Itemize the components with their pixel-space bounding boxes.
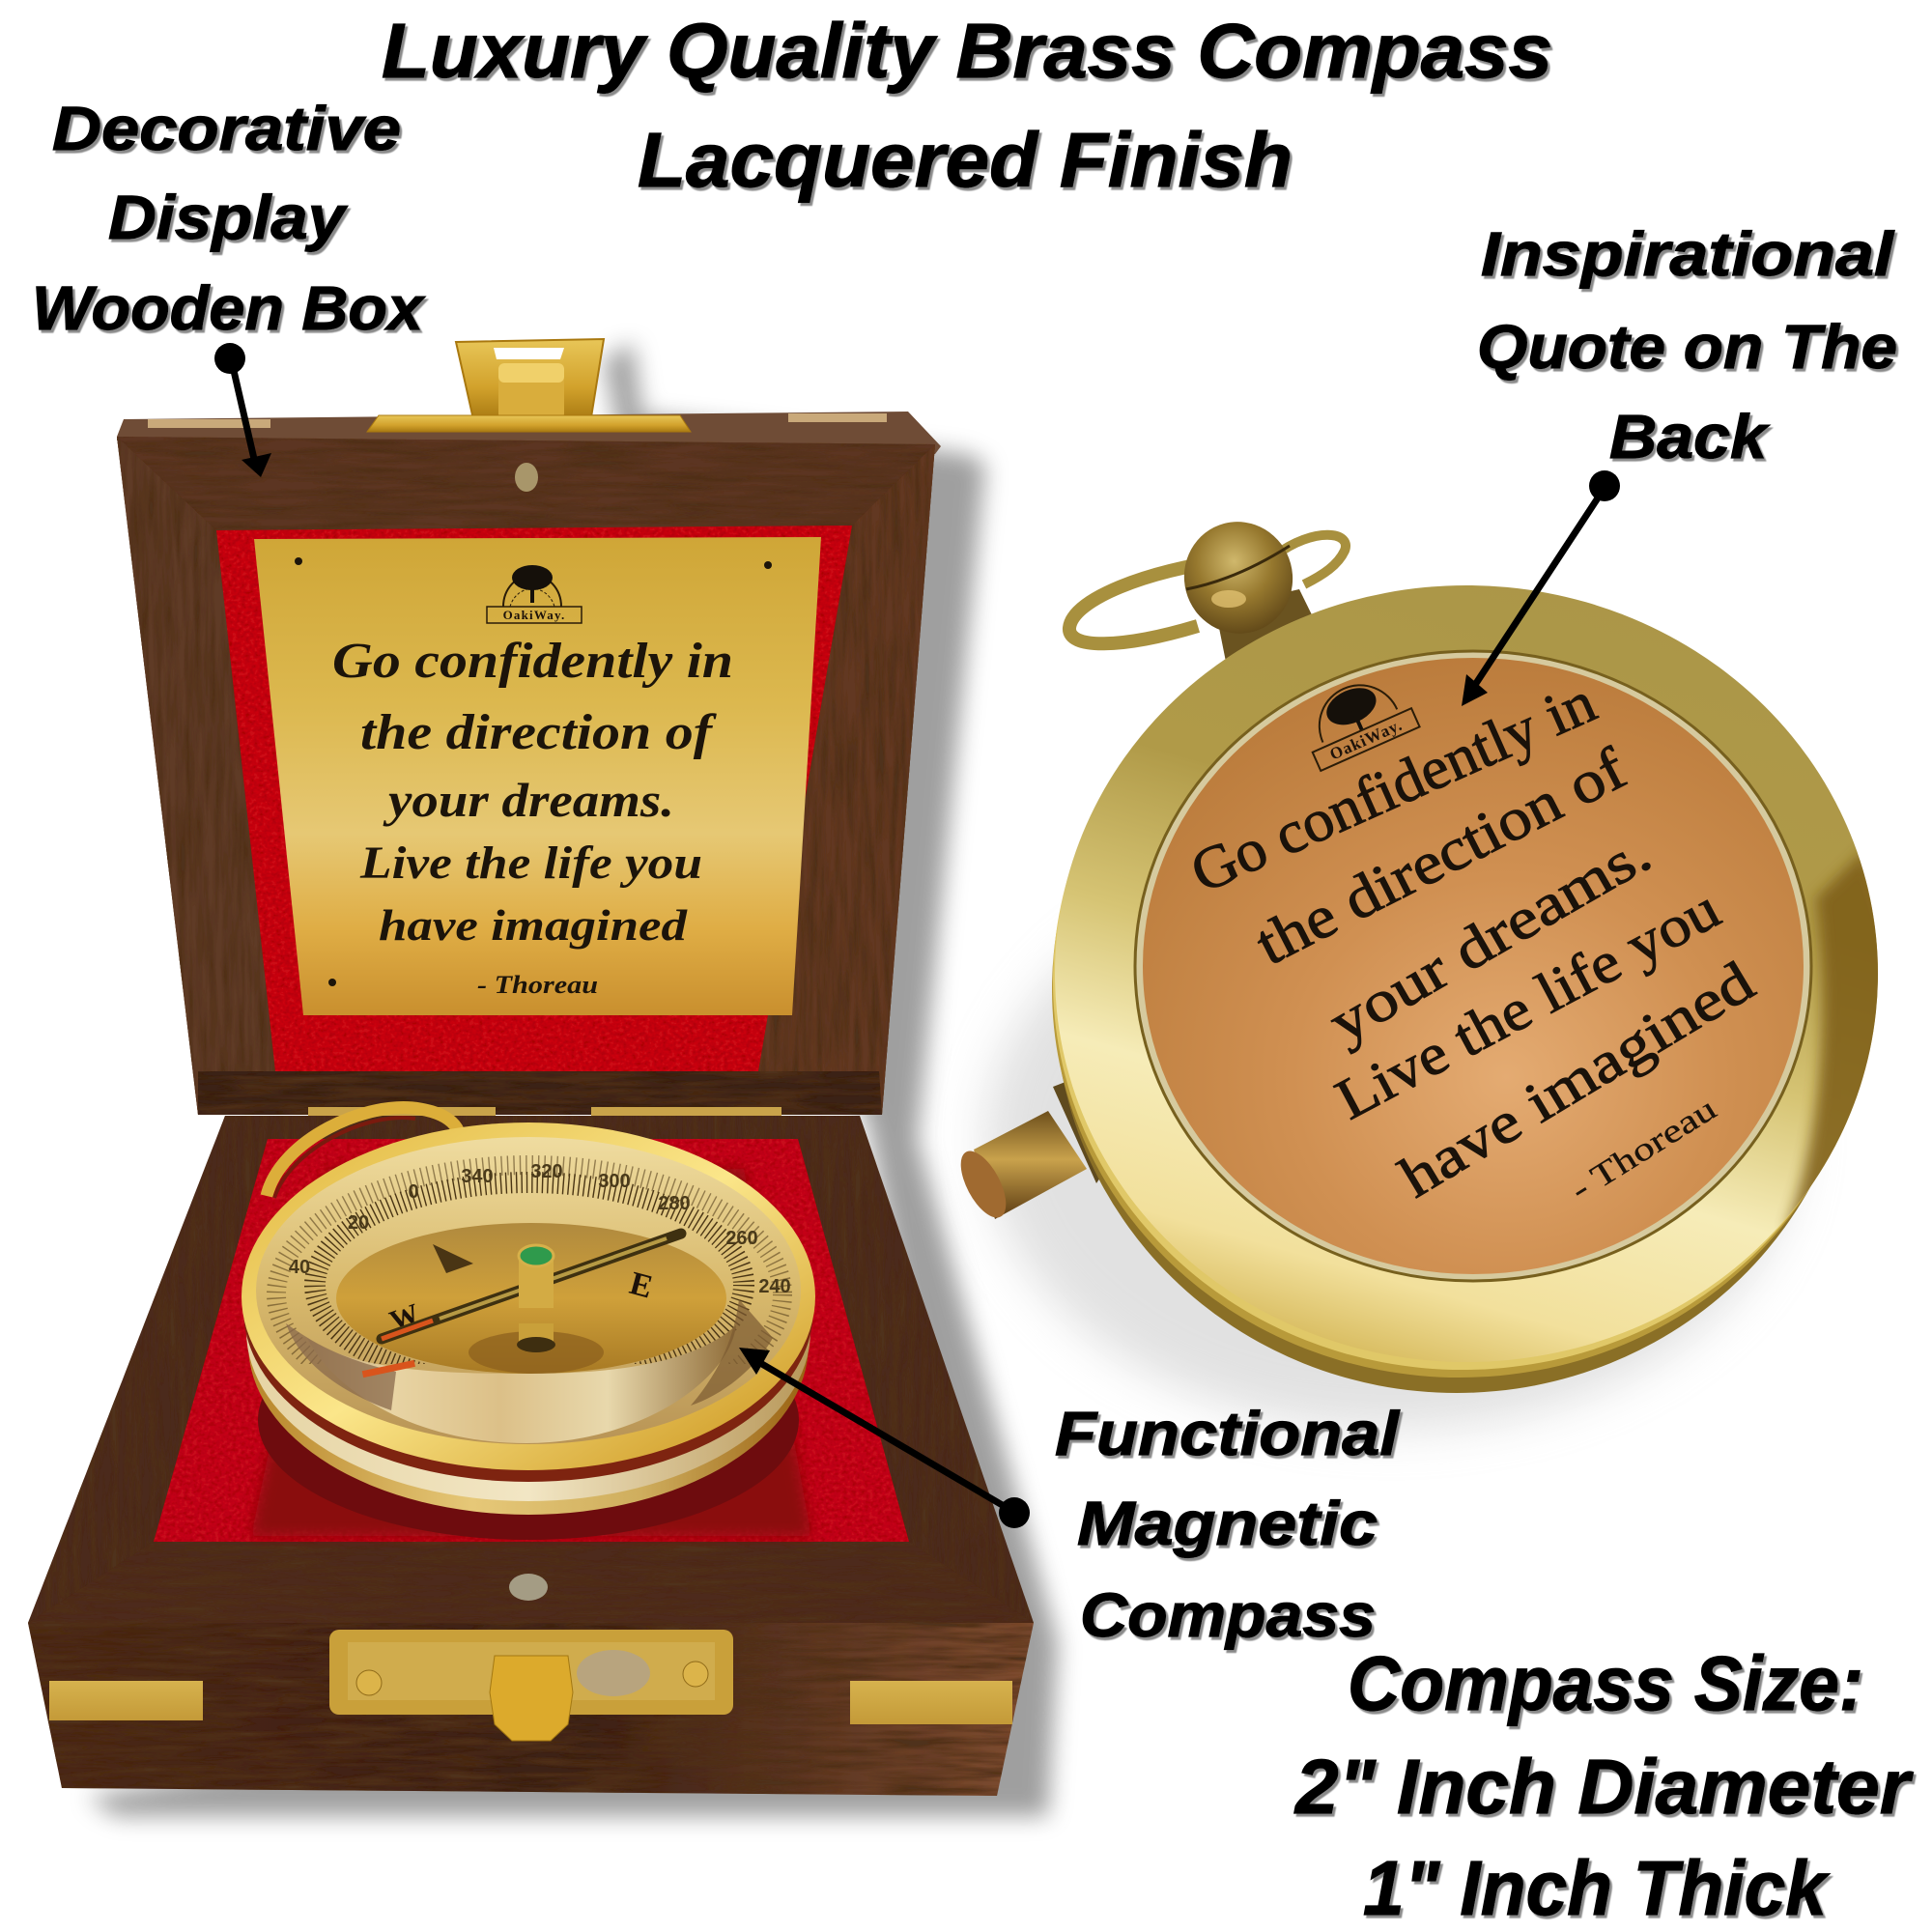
copper quote plate (1135, 651, 1811, 1281)
size specification text (1293, 1640, 1914, 1931)
engraved quote text: have imagined (1389, 949, 1765, 1209)
callout label: wooden box: Wooden Box (32, 273, 425, 343)
degree numbers: 280 (658, 1193, 691, 1214)
wooden lid frame (117, 412, 941, 1115)
needle (362, 1234, 681, 1378)
illustration: open wooden display box (28, 339, 1058, 1816)
red velvet lid lining (216, 526, 852, 1071)
crown knob (1172, 509, 1325, 667)
arrow: inspirational quote (1462, 470, 1620, 706)
arrow: wooden box (214, 343, 271, 477)
callout label: inspirational quote: Quote on The (1477, 312, 1897, 382)
callout label: functional compass: Compass (1080, 1580, 1376, 1650)
callout label: wooden box: Display (108, 183, 349, 252)
soft shadow (985, 850, 1797, 1430)
push button (952, 1080, 1116, 1225)
plaque quote text: Go confidently in (332, 634, 733, 689)
box front face (28, 1623, 1034, 1796)
box drop shadow (87, 343, 1058, 1816)
degree numbers: 260 (725, 1228, 758, 1249)
rim dark crescent (1779, 850, 1878, 1226)
degree numbers (289, 1161, 791, 1297)
OakiWay logo rotated (1294, 667, 1420, 771)
dial letters: E (626, 1265, 656, 1306)
brass rim (1055, 585, 1878, 1362)
plaque quote text: have imagined (379, 900, 688, 950)
callout label: wooden box: Decorative (52, 94, 401, 163)
compass ring (267, 1108, 460, 1196)
right brass strip (850, 1681, 1012, 1724)
gold quote plaque (254, 537, 821, 1015)
size specification text: Compass Size: (1348, 1640, 1863, 1726)
degree numbers: 40 (289, 1257, 310, 1278)
lens band (307, 1325, 736, 1443)
engraved quote text: Go confidently in (1181, 669, 1605, 906)
title: Lacquered Finish (638, 117, 1293, 203)
illustration: compass back with engraved quote (952, 509, 1903, 1430)
OakiWay logo: OakiWay. (503, 608, 565, 622)
case side (1055, 609, 1859, 1393)
callout label: wooden box (32, 94, 425, 343)
dial letters: W (385, 1297, 424, 1338)
box base interior (28, 1071, 1034, 1623)
front clasp (329, 1630, 733, 1741)
plaque quote text: the direction of (360, 705, 717, 760)
engraved quote text (1181, 669, 1765, 1209)
degree numbers: 20 (348, 1212, 369, 1234)
hanging ring (1069, 535, 1346, 643)
plaque quote text: - Thoreau (477, 971, 598, 999)
size specification text: 2" Inch Diameter (1293, 1744, 1914, 1830)
engraved quote text: - Thoreau (1565, 1091, 1722, 1208)
hinges (308, 1107, 496, 1116)
plaque quote text: Live the life you (359, 838, 702, 889)
engraved quote text: Live the life you (1325, 876, 1730, 1131)
callout label: functional compass: Functional (1055, 1399, 1400, 1468)
dial letters (385, 1244, 656, 1338)
plaque quote text (332, 634, 733, 999)
plaque quote text: your dreams. (384, 773, 674, 827)
size specification text: 1" Inch Thick (1363, 1845, 1830, 1931)
degree numbers: 240 (758, 1276, 791, 1297)
callout label: inspirational quote: Back (1609, 402, 1771, 471)
left brass strip (49, 1681, 203, 1720)
degree numbers: 300 (598, 1171, 631, 1192)
arrow: functional compass (739, 1348, 1030, 1528)
lid brass clasp (367, 339, 691, 432)
callout label: functional compass: Magnetic (1077, 1489, 1378, 1558)
title (382, 8, 1552, 203)
OakiWay logo rotated: OakiWay. (1327, 716, 1406, 764)
title: Luxury Quality Brass Compass (382, 8, 1552, 94)
brass compass in box (242, 1108, 815, 1540)
degree numbers: 0 (408, 1181, 419, 1203)
callout label: inspirational quote: Inspirational (1481, 219, 1894, 289)
degree scale (267, 1155, 792, 1364)
engraved quote text: your dreams. (1318, 820, 1662, 1055)
degree numbers: 340 (461, 1166, 494, 1187)
callout label: inspirational quote (1477, 219, 1897, 471)
degree numbers: 320 (530, 1161, 563, 1182)
lid screw (515, 463, 538, 492)
engraved quote text: the direction of (1245, 735, 1636, 978)
inner dial (336, 1223, 726, 1374)
OakiWay logo (487, 565, 582, 623)
box front latch screw (509, 1574, 548, 1601)
red velvet base lining (154, 1139, 909, 1542)
centre pin (517, 1245, 555, 1352)
callout label: functional compass (1055, 1399, 1400, 1650)
